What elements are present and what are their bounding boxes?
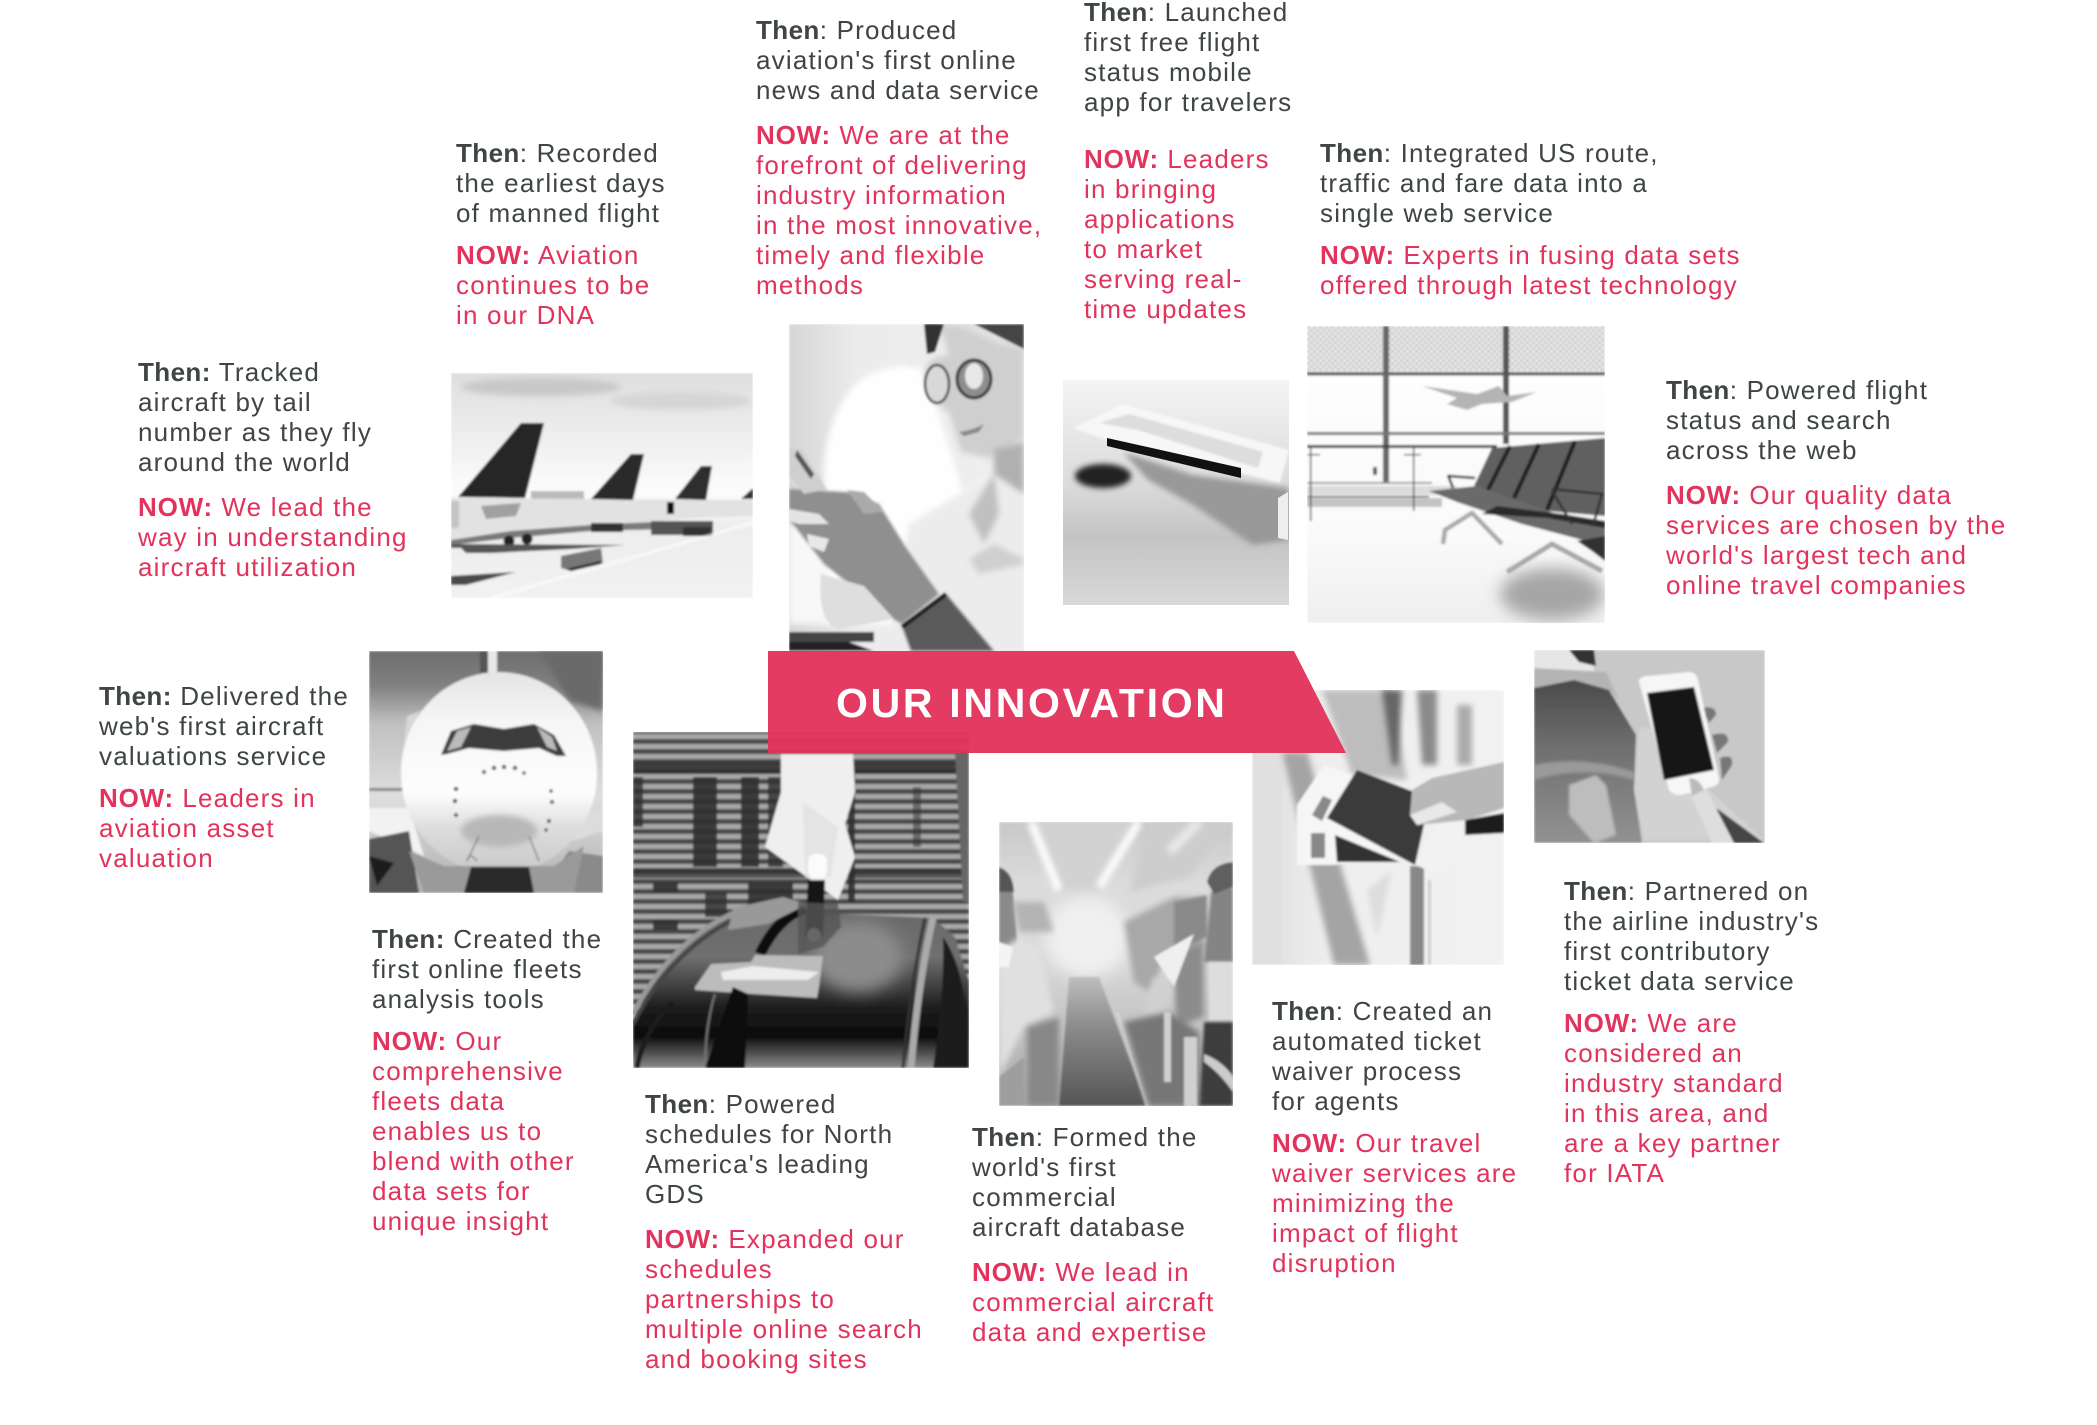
text: integrated US route traffic and fare data: NOW: Experts in fusing data sets: [1320, 240, 1741, 270]
image: airliner nose seen head on: [369, 651, 603, 893]
text: created automated ticket waiver: minimizing the: [1272, 1188, 1455, 1218]
text: tracked aircraft by tail number: way in understanding: [138, 522, 408, 552]
text: created automated ticket waiver: impact of flight: [1272, 1218, 1459, 1248]
text: produced aviation's first online news: NOW: We are at the: [756, 120, 1011, 150]
text: delivered first aircraft valuations: Then: Delivered the: [99, 681, 349, 711]
text: integrated US route traffic and fare data: Then: Integrated US route,: [1320, 138, 1659, 168]
image: blurred airplane cabin aisle: [999, 822, 1233, 1106]
text: integrated US route traffic and fare data: offered through latest technology: [1320, 270, 1738, 300]
text: recorded earliest days of manned flight: the earliest days: [456, 168, 666, 198]
text: formed first commercial aircraft database: world's first: [972, 1152, 1117, 1182]
text: delivered first aircraft valuations: web's first aircraft: [99, 711, 324, 741]
text: powered schedules for GDS: Then: Powered: [645, 1089, 837, 1119]
text: produced aviation's first online news: industry information: [756, 180, 1007, 210]
text: powered flight status and search: world's largest tech and: [1666, 540, 1967, 570]
text: tracked aircraft by tail number: aircraft utilization: [138, 552, 357, 582]
text: partnered on ticket data service: ticket data service: [1564, 966, 1795, 996]
text: created first online fleets analysis: Then: Created the: [372, 924, 602, 954]
text: powered flight status and search: [1666, 375, 2006, 600]
text: created automated ticket waiver: Then: Created an: [1272, 996, 1493, 1026]
text: partnered on ticket data service: NOW: We are: [1564, 1008, 1738, 1038]
text: powered flight status and search: status and search: [1666, 405, 1892, 435]
text: delivered first aircraft valuations: valuation: [99, 843, 214, 873]
text: powered schedules for GDS: [645, 1089, 923, 1374]
image: hand holding a tablet: [1063, 380, 1289, 605]
text: formed first commercial aircraft database: commercial aircraft: [972, 1287, 1214, 1317]
text: powered schedules for GDS: schedules: [645, 1254, 773, 1284]
text: powered schedules for GDS: and booking sites: [645, 1344, 868, 1374]
text: formed first commercial aircraft database: commercial: [972, 1182, 1117, 1212]
text: produced aviation's first online news: Then: Produced: [756, 15, 957, 45]
text: launched free flight status app: first free flight: [1084, 27, 1260, 57]
text: created first online fleets analysis: [372, 924, 602, 1236]
text: tracked aircraft by tail number: aircraft by tail: [138, 387, 312, 417]
image: airport departure lounge with plane outside: [1307, 326, 1605, 623]
text: produced aviation's first online news: news and data service: [756, 75, 1040, 105]
text: powered schedules for GDS: GDS: [645, 1179, 705, 1209]
text: launched free flight status app: in bringing: [1084, 174, 1217, 204]
text: produced aviation's first online news: methods: [756, 270, 864, 300]
text: launched free flight status app: applications: [1084, 204, 1236, 234]
text: powered flight status and search: across the web: [1666, 435, 1858, 465]
text: created first online fleets analysis: blend with other: [372, 1146, 575, 1176]
text: integrated US route traffic and fare data: single web service: [1320, 198, 1554, 228]
text: created first online fleets analysis: data sets for: [372, 1176, 531, 1206]
text: powered schedules for GDS: multiple online search: [645, 1314, 923, 1344]
text: delivered first aircraft valuations: valuations service: [99, 741, 327, 771]
banner title: OUR INNOVATION: [836, 680, 1228, 726]
text: tracked aircraft by tail number: NOW: We lead the: [138, 492, 373, 522]
text: formed first commercial aircraft database: data and expertise: [972, 1317, 1208, 1347]
text: created automated ticket waiver: automated ticket: [1272, 1026, 1482, 1056]
text: partnered on ticket data service: the airline industry's: [1564, 906, 1819, 936]
text: created automated ticket waiver: [1272, 996, 1517, 1278]
text: powered schedules for GDS: America's leading: [645, 1149, 870, 1179]
text: created automated ticket waiver: waiver process: [1272, 1056, 1462, 1086]
text: tracked aircraft by tail number: around the world: [138, 447, 351, 477]
text: tracked aircraft by tail number: number as they fly: [138, 417, 372, 447]
text: created automated ticket waiver: NOW: Our travel: [1272, 1128, 1482, 1158]
text: recorded earliest days of manned flight: [456, 138, 666, 330]
text: launched free flight status app: app for travelers: [1084, 87, 1292, 117]
text: recorded earliest days of manned flight: continues to be: [456, 270, 650, 300]
text: partnered on ticket data service: in this area, and: [1564, 1098, 1769, 1128]
text: partnered on ticket data service: considered an: [1564, 1038, 1743, 1068]
text: powered schedules for GDS: partnerships to: [645, 1284, 835, 1314]
text: delivered first aircraft valuations: [99, 681, 349, 873]
text: tracked aircraft by tail number: [138, 357, 408, 582]
text: produced aviation's first online news: [756, 15, 1042, 300]
text: partnered on ticket data service: Then: Partnered on: [1564, 876, 1809, 906]
text: formed first commercial aircraft database: NOW: We lead in: [972, 1257, 1190, 1287]
text: recorded earliest days of manned flight: of manned flight: [456, 198, 660, 228]
text: created first online fleets analysis: comprehensive: [372, 1056, 564, 1086]
text: created automated ticket waiver: for agents: [1272, 1086, 1400, 1116]
text: created first online fleets analysis: unique insight: [372, 1206, 549, 1236]
image: woman with glasses using a phone: [789, 324, 1024, 660]
text: recorded earliest days of manned flight: Then: Recorded: [456, 138, 659, 168]
text: delivered first aircraft valuations: NOW: Leaders in: [99, 783, 316, 813]
text: created automated ticket waiver: disruption: [1272, 1248, 1397, 1278]
text: recorded earliest days of manned flight: NOW: Aviation: [456, 240, 640, 270]
text: formed first commercial aircraft database: [972, 1122, 1214, 1347]
text: created first online fleets analysis: first online fleets: [372, 954, 583, 984]
text: delivered first aircraft valuations: aviation asset: [99, 813, 275, 843]
image: aircraft tails on the apron: [451, 373, 753, 598]
text: produced aviation's first online news: in the most innovative,: [756, 210, 1042, 240]
image: hand holding smartphone over jeans: [1534, 650, 1765, 843]
banner ribbon: [768, 651, 1346, 753]
text: produced aviation's first online news: timely and flexible: [756, 240, 985, 270]
text: produced aviation's first online news: forefront of delivering: [756, 150, 1028, 180]
text: powered flight status and search: services are chosen by the: [1666, 510, 2006, 540]
text: launched free flight status app: [1084, 0, 1292, 324]
text: formed first commercial aircraft database: aircraft database: [972, 1212, 1186, 1242]
text: created first online fleets analysis: analysis tools: [372, 984, 545, 1014]
text: integrated US route traffic and fare data: traffic and fare data into a: [1320, 168, 1648, 198]
text: launched free flight status app: to market: [1084, 234, 1203, 264]
image: hand holding passport and boarding passes: [1252, 690, 1504, 965]
text: launched free flight status app: serving real-: [1084, 264, 1243, 294]
text: partnered on ticket data service: [1564, 876, 1819, 1188]
text: partnered on ticket data service: industry standard: [1564, 1068, 1784, 1098]
text: powered schedules for GDS: schedules for North: [645, 1119, 893, 1149]
text: created first online fleets analysis: enables us to: [372, 1116, 542, 1146]
text: recorded earliest days of manned flight: in our DNA: [456, 300, 595, 330]
image: hand lifting leather bag in front of departure board: [633, 732, 969, 1068]
text: launched free flight status app: status mobile: [1084, 57, 1253, 87]
text: created first online fleets analysis: fleets data: [372, 1086, 505, 1116]
text: powered flight status and search: Then: Powered flight: [1666, 375, 1928, 405]
image collage and banner: [369, 324, 1765, 1106]
text: integrated US route traffic and fare data: [1320, 138, 1741, 300]
text: launched free flight status app: NOW: Leaders: [1084, 144, 1270, 174]
text: powered flight status and search: NOW: Our quality data: [1666, 480, 1952, 510]
text: tracked aircraft by tail number: Then: Tracked: [138, 357, 320, 387]
text: created automated ticket waiver: waiver services are: [1272, 1158, 1517, 1188]
text: formed first commercial aircraft database: Then: Formed the: [972, 1122, 1198, 1152]
text: created first online fleets analysis: NOW: Our: [372, 1026, 502, 1056]
text: partnered on ticket data service: for IATA: [1564, 1158, 1665, 1188]
text: powered schedules for GDS: NOW: Expanded our: [645, 1224, 905, 1254]
text: launched free flight status app: time updates: [1084, 294, 1247, 324]
text: produced aviation's first online news: aviation's first online: [756, 45, 1017, 75]
text: partnered on ticket data service: are a key partner: [1564, 1128, 1781, 1158]
text: powered flight status and search: online travel companies: [1666, 570, 1967, 600]
text: partnered on ticket data service: first contributory: [1564, 936, 1771, 966]
